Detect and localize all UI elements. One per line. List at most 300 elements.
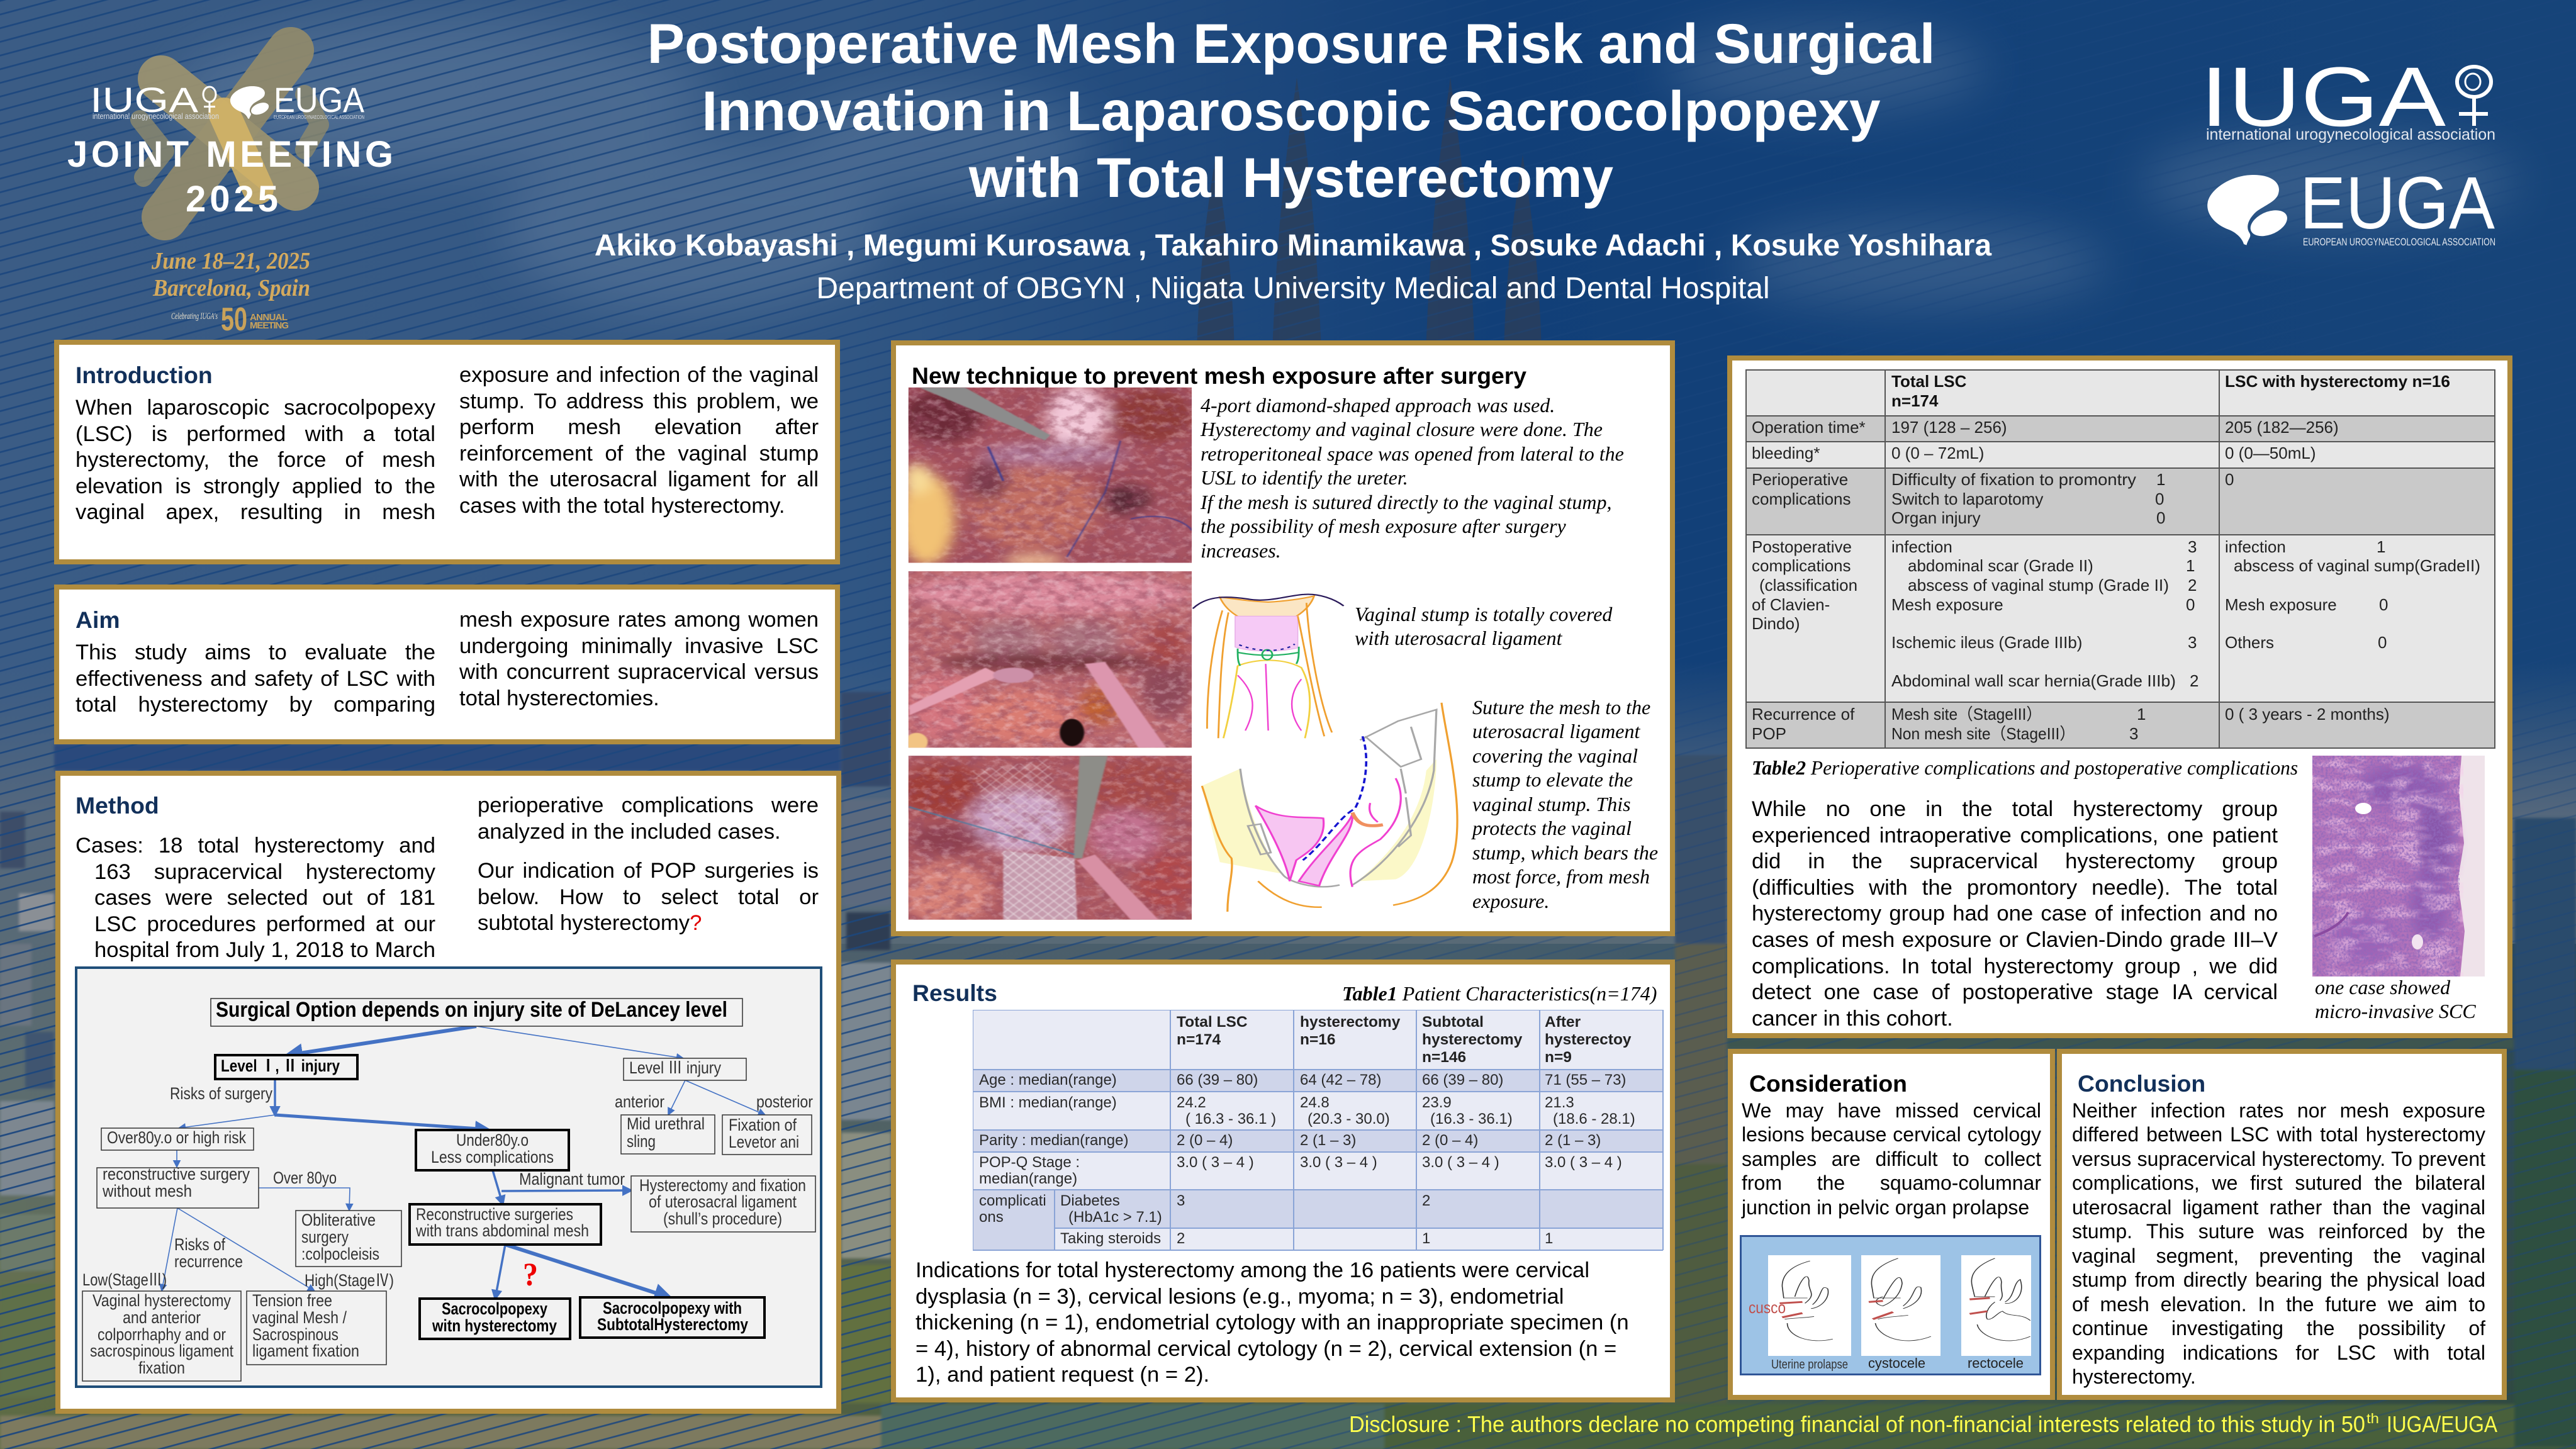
table 1 header row: hysterectomy <box>1300 1014 1401 1031</box>
small EUGA logo <box>230 80 365 120</box>
table 2 total LSC column <box>1891 418 2198 743</box>
small EUGA logo: EUROPEAN UROGYNAECOLOGICAL ASSOCIATION <box>274 115 364 120</box>
figure: prolapse diagrams <box>1740 1235 2041 1375</box>
box: sacrocolpopexy with hysterectomy <box>420 1299 570 1339</box>
table 2 row labels: Operation time* <box>1752 418 1866 437</box>
text: introduction left column: When laparoscopic sacrocolpopexy <box>76 396 435 420</box>
table 2 row labels <box>1752 418 1866 743</box>
text: method right column: perioperative complications were <box>478 793 819 817</box>
text: aim right column: undergoing minimally invasive LSC <box>459 634 819 658</box>
text: method left column: 163 supracervical hysterectomy <box>94 860 435 884</box>
box: over 80 or high risk: Over80y.o or high risk <box>107 1128 246 1147</box>
text: suture caption: vaginal stump. This <box>1472 793 1631 815</box>
label: anterior and posterior: posterior <box>756 1092 813 1111</box>
table 1 data rows: ons <box>979 1209 1004 1226</box>
caption: table 2: Table2 Perioperative complications and postoperative complications <box>1752 757 2298 779</box>
text: consideration <box>1742 1099 2041 1219</box>
text: aim right column: mesh exposure rates among women <box>459 608 819 632</box>
text: indications for total hysterectomy: thickening (n = 1), endometrial cytology with an inappropriate specimen (n <box>916 1311 1629 1334</box>
text: introduction right column: cases with the total hysterectomy. <box>459 494 785 518</box>
table 2 LSC with hysterectomy column: abscess of vaginal sump(GradeII) <box>2234 556 2480 575</box>
label: cusco: cusco <box>1749 1298 1786 1317</box>
EUGA logo <box>2207 162 2495 248</box>
table 1 header row: n=146 <box>1422 1049 1466 1066</box>
text: complications findings: cancer in this cohort. <box>1752 1007 1953 1031</box>
text: consideration: junction in pelvic organ prolapse <box>1742 1196 2029 1219</box>
box: tension free vaginal mesh: Tension free <box>252 1291 332 1310</box>
photo: vaginal stump laparoscopic view <box>899 386 1194 567</box>
box: obliterative surgery <box>296 1211 401 1267</box>
table 2 row labels: POP <box>1752 724 1786 743</box>
text: conclusion: stump. This suture was reinforced by the <box>2072 1220 2485 1243</box>
table 1 data rows: median(range) <box>979 1170 1077 1187</box>
table 2 total LSC column: Difficulty of fixation to promontry <box>1891 470 2136 489</box>
label: over 80yo: Over 80yo <box>273 1168 337 1187</box>
box: tension free vaginal mesh: vaginal Mesh / <box>252 1308 347 1327</box>
box: sacrocolpopexy with hysterectomy: Sacrocolpopexy <box>442 1299 547 1318</box>
meeting name: JOINT MEETING <box>67 134 393 175</box>
table 2 LSC with hysterectomy column: 1 <box>2377 537 2385 556</box>
table 1 data rows: 2 <box>1422 1192 1430 1209</box>
box: fixation of levetor ani: Levetor ani <box>729 1133 799 1151</box>
table 2 row labels: Recurrence of <box>1752 705 1855 724</box>
text: aim right column <box>459 607 819 712</box>
text: introduction left column <box>76 396 435 524</box>
label: low and high stage: Low(StageⅢ) <box>82 1270 167 1289</box>
text: complications findings: experienced intraoperative complications, one patient <box>1752 824 2278 848</box>
panel: results <box>891 959 1675 1402</box>
box: hysterectomy and fixation: (shull’s procedure) <box>663 1209 782 1228</box>
text: aim left column <box>76 640 435 719</box>
text: aim right column: with concurrent supracervical versus <box>459 660 819 684</box>
box: reconstructive surgeries with mesh: with trans abdominal mesh <box>415 1221 589 1240</box>
caption: table 1: Table1 Patient Characteristics(n=174) <box>1342 982 1657 1005</box>
text: complications findings: hysterectomy group had one case of infection and no <box>1752 902 2278 926</box>
text: method left column: Cases: 18 total hysterectomy and <box>76 834 435 858</box>
text: introduction right column: perform mesh elevation after <box>459 415 819 439</box>
text: suture caption: protects the vaginal <box>1472 817 1632 839</box>
image: histology micrograph <box>2312 756 2485 976</box>
text: conclusion: versus supracervical hysterectomy. To prevent <box>2072 1148 2485 1170</box>
panel: new technique <box>891 340 1675 936</box>
dates and location: June 18–21, 2025 <box>151 248 310 274</box>
text: consideration: from the squamo-columnar <box>1742 1172 2041 1194</box>
small IUGA logo <box>90 80 219 121</box>
box: tension free vaginal mesh: Sacrospinous <box>252 1325 339 1344</box>
text: suture caption: most force, from mesh <box>1472 865 1650 888</box>
text: complications findings: did in the supracervical hysterectomy group <box>1752 849 2278 873</box>
text: consideration: We may have missed cervical <box>1742 1099 2041 1122</box>
table 1 data rows: 2 (0 – 4) <box>1422 1132 1478 1149</box>
text: introduction right column <box>459 363 819 518</box>
table 1 data rows: (16.3 - 36.1) <box>1430 1111 1513 1127</box>
table 1 data rows: 1 <box>1545 1230 1553 1247</box>
table 2 row labels: complications <box>1752 556 1851 575</box>
box: sacrocolpopexy with hysterectomy: witn hysterectomy <box>432 1316 557 1335</box>
logo: IUGA EUGA Joint Meeting 2025 <box>67 27 393 338</box>
table 2 total LSC column: Non mesh site（StageIII） <box>1891 724 2075 743</box>
diagram: uterine prolapse <box>1768 1255 1851 1372</box>
label: risks of recurrence: recurrence <box>174 1252 243 1271</box>
box: obliterative surgery: :colpocleisis <box>301 1245 379 1263</box>
table 2 total LSC column: Mesh site（StageIII） <box>1891 705 2042 724</box>
heading: Results: Results <box>912 980 997 1006</box>
box: under 80 less complications: Under80y.o <box>456 1131 529 1150</box>
heading: Method: Method <box>76 792 159 819</box>
table 2 total LSC column: 0 (0 – 72mL) <box>1891 444 1984 462</box>
diagram: vaginal stump covered by ligament <box>1193 595 1343 738</box>
table 1 data rows: ( 16.3 - 36.1 ) <box>1185 1111 1276 1127</box>
box: tension free vaginal mesh: ligament fixation <box>252 1341 359 1360</box>
box: reconstructive surgeries with mesh: Reconstructive surgeries <box>416 1205 573 1224</box>
text: indications for total hysterectomy: = 4), history of abnormal cervical cytology (n = 2), cervical extension (n = <box>916 1337 1616 1361</box>
diagram: sagittal view mesh suture <box>1202 703 1457 912</box>
table 1 data rows: 3.0 ( 3 – 4 ) <box>1545 1154 1622 1171</box>
text: suture caption: uterosacral ligament <box>1472 720 1640 742</box>
text: introduction right column: exposure and infection of the vaginal <box>459 363 819 387</box>
text: method left column: cases were selected out of 181 <box>94 886 435 910</box>
text: complications findings: (difficulties with the promontory needle). The total <box>1752 876 2278 900</box>
table 1 data rows: 3 <box>1177 1192 1185 1209</box>
table 1 data rows: 23.9 <box>1422 1094 1452 1111</box>
table 1 header row: n=16 <box>1300 1031 1336 1048</box>
text: technique description: 4-port diamond-shaped approach was used. <box>1201 394 1555 417</box>
table 2 LSC with hysterectomy column: Mesh exposure <box>2225 595 2337 614</box>
small IUGA logo: IUGA <box>90 80 199 120</box>
table 2 row labels: (classification <box>1759 576 1857 595</box>
table 1 data rows: BMI : median(range) <box>979 1094 1117 1111</box>
table 2 LSC with hysterectomy column: 0 ( 3 years - 2 months) <box>2225 705 2390 724</box>
table 1 header row: hysterectoy <box>1545 1031 1632 1048</box>
text: technique description: Hysterectomy and vaginal closure were done. The <box>1201 418 1603 440</box>
table 1 data rows: (HbA1c > 7.1) <box>1068 1209 1162 1226</box>
box: fixation of levetor ani <box>722 1115 812 1155</box>
table 1 data rows: Age : median(range) <box>979 1071 1117 1088</box>
box: vaginal hysterectomy: colporrhaphy and or <box>98 1325 226 1344</box>
text: technique description: increases. <box>1201 539 1281 562</box>
label: low and high stage: High(StageⅣ) <box>305 1271 394 1290</box>
50th annual meeting mark: ANNUAL <box>250 312 288 323</box>
text: method right column: Our indication of POP surgeries is <box>478 859 819 883</box>
text: technique description: retroperitoneal space was opened from lateral to the <box>1201 442 1624 465</box>
table 2 total LSC column: Mesh exposure <box>1891 595 2003 614</box>
title <box>647 12 1935 209</box>
table 2 LSC with hysterectomy column: 0 <box>2225 470 2234 489</box>
table 1 data rows <box>979 1071 1635 1247</box>
panel: complications table and findings <box>1727 355 2512 1038</box>
box: vaginal hysterectomy: Vaginal hysterectomy <box>92 1291 231 1310</box>
50th annual meeting mark <box>221 301 289 338</box>
table 1 data rows: (18.6 - 28.1) <box>1553 1111 1635 1127</box>
table 1 data rows: complicati <box>979 1192 1046 1209</box>
diagram: cystocele: cystocele <box>1868 1355 1925 1371</box>
text: suture caption: covering the vaginal <box>1472 744 1638 767</box>
table 1 data rows: 3.0 ( 3 – 4 ) <box>1300 1154 1377 1171</box>
box: hysterectomy and fixation <box>631 1176 815 1232</box>
label: anterior and posterior: anterior <box>615 1092 664 1111</box>
label: low and high stage <box>82 1270 394 1290</box>
text: introduction left column: elevation is strongly applied to the <box>76 474 435 498</box>
text: technique description: If the mesh is sutured directly to the vaginal stump, <box>1201 491 1612 513</box>
table 1 data rows: 2 (1 – 3) <box>1545 1132 1601 1149</box>
text: indications for total hysterectomy <box>916 1258 1658 1389</box>
text: method left column: LSC procedures performed at our <box>94 912 435 936</box>
panel: method <box>55 771 841 1414</box>
table 1 data rows: 2 (1 – 3) <box>1300 1132 1356 1149</box>
figures: surgical photos and anatomical diagrams <box>909 388 1459 920</box>
table 1 header row: hysterectomy <box>1422 1031 1523 1048</box>
box: vaginal hysterectomy: and anterior <box>123 1308 201 1327</box>
table 1 data rows: 2 <box>1177 1230 1185 1247</box>
box: obliterative surgery: surgery <box>301 1228 349 1246</box>
EUGA logo: EUGA <box>2300 162 2495 245</box>
small EUGA logo: EUGA <box>274 80 365 120</box>
table 1 data rows: Diabetes <box>1060 1192 1120 1209</box>
box: Level I, II injury: Level Ⅰ, Ⅱ injury <box>221 1056 340 1075</box>
table 2 LSC with hysterectomy column: 205 (182—256) <box>2225 418 2339 437</box>
table 2 row labels: Perioperative <box>1752 470 1848 489</box>
panel: aim <box>54 585 840 744</box>
text: indications for total hysterectomy: 1), and patient request (n = 2). <box>916 1363 1209 1387</box>
table 2 total LSC column: 1 <box>2186 556 2195 575</box>
box: vaginal hysterectomy <box>82 1291 241 1381</box>
title: Innovation in Laparoscopic Sacrocolpopexy <box>702 79 1881 142</box>
table 2 LSC with hysterectomy column: infection <box>2225 537 2286 556</box>
text: complications findings: complications. In total hysterectomy group , we did <box>1752 954 2278 978</box>
text: introduction right column: stump. To address this problem, we <box>459 389 819 413</box>
text: conclusion: vaginal segment, preventing the vaginal <box>2072 1245 2485 1267</box>
IUGA logo <box>2200 50 2495 144</box>
text: method right column: analyzed in the included cases. <box>478 820 781 844</box>
box: fixation of levetor ani: Fixation of <box>729 1116 797 1134</box>
table 2 total LSC column: 1 <box>2156 470 2165 489</box>
text: complications findings <box>1752 797 2278 1032</box>
text: conclusion: differed between LSC with total hysterectomy <box>2072 1123 2485 1146</box>
diagram: cystocele <box>1861 1255 1940 1371</box>
disclosure <box>1347 1407 2504 1442</box>
heading: Conclusion: Conclusion <box>2078 1070 2205 1097</box>
caption: histology: micro-invasive SCC <box>2315 1000 2476 1022</box>
label: anterior and posterior <box>615 1092 813 1111</box>
table 2 LSC with hysterectomy column: Others <box>2225 633 2274 652</box>
table 2 LSC with hysterectomy column: 0 <box>2379 595 2388 614</box>
table 1 header row: n=9 <box>1545 1049 1572 1066</box>
table 1 header row <box>1177 1014 1632 1066</box>
text: technique description: the possibility of mesh exposure after surgery <box>1201 515 1566 537</box>
box: vaginal hysterectomy: sacrospinous ligament <box>90 1341 233 1360</box>
text: method left column: hospital from July 1, 2018 to March <box>94 938 435 962</box>
box: mid urethral sling <box>621 1114 715 1154</box>
table 2 total LSC column: 197 (128 – 256) <box>1891 418 2007 437</box>
table 1 data rows: 3.0 ( 3 – 4 ) <box>1177 1154 1254 1171</box>
text: indications for total hysterectomy: Indications for total hysterectomy among the 16 patients were cervical <box>916 1258 1589 1282</box>
logos: IUGA and EUGA <box>2200 57 2495 248</box>
table 2 row labels: complications <box>1752 490 1851 508</box>
table 1 header row: After <box>1545 1014 1581 1031</box>
text: aim right column: total hysterectomies. <box>459 686 659 710</box>
table 2 total LSC column: 3 <box>2188 537 2197 556</box>
table 2 row labels: of Clavien- <box>1752 595 1830 614</box>
table 1 data rows: Taking steroids <box>1060 1230 1161 1247</box>
authors: Akiko Kobayashi , Megumi Kurosawa , Takahiro Minamikawa , Sosuke Adachi , Kosuke Yoshihara <box>595 229 1991 262</box>
text: consideration: samples are difficult to collect <box>1742 1148 2041 1170</box>
text: suture caption: exposure. <box>1472 890 1549 912</box>
table: perioperative and postoperative complications <box>1745 369 2496 749</box>
table 1 data rows: 64 (42 – 78) <box>1300 1071 1381 1088</box>
text: stump covered caption: with uterosacral ligament <box>1355 627 1562 649</box>
affiliation: Department of OBGYN , Niigata University Medical and Dental Hospital <box>816 272 1770 305</box>
box: sacrocolpopexy with subtotal hysterectomy: Sacrocolpopexy with <box>603 1299 742 1318</box>
text: suture caption: stump to elevate the <box>1472 768 1633 791</box>
text: aim left column: total hysterectomy by comparing <box>76 693 435 717</box>
text: conclusion: continue investigating the possibility of <box>2072 1317 2485 1340</box>
table 2 total LSC column: Switch to laparotomy <box>1891 490 2043 508</box>
table 2 total LSC column: infection <box>1891 537 1952 556</box>
table 1 data rows: 1 <box>1422 1230 1430 1247</box>
table 2 LSC with hysterectomy column <box>2225 418 2480 724</box>
IUGA logo: international urogynecological association <box>2206 126 2495 143</box>
disclosure: th <box>2366 1411 2379 1426</box>
text: conclusion: Neither infection rates nor mesh exposure <box>2072 1099 2485 1122</box>
text: introduction left column: (LSC) is performed with a total <box>76 422 435 446</box>
icon: tan X emblem <box>140 50 320 217</box>
table 2 total LSC column: Organ injury <box>1891 508 1981 527</box>
text: introduction left column: vaginal apex, resulting in mesh <box>76 500 435 524</box>
box: reconstructive surgery without mesh <box>97 1165 259 1208</box>
caption: histology <box>2315 975 2476 1024</box>
table: patient characteristics <box>973 1010 1664 1251</box>
table 1 data rows: (20.3 - 30.0) <box>1308 1111 1390 1127</box>
table 1 data rows: 71 (55 – 73) <box>1545 1071 1626 1088</box>
box: sacrocolpopexy with subtotal hysterectomy: SubtotalHysterectomy <box>597 1315 748 1334</box>
label: malignant tumor: Malignant tumor <box>519 1170 625 1189</box>
dates and location: Barcelona, Spain <box>152 275 310 301</box>
text: aim left column: effectiveness and safety of LSC with <box>76 667 435 691</box>
50th annual meeting mark: 50 <box>221 301 247 338</box>
heading: new technique: New technique to prevent mesh exposure after surgery <box>912 362 1526 389</box>
table 1 data rows: 21.3 <box>1545 1094 1574 1111</box>
text: suture caption <box>1472 695 1658 913</box>
small IUGA logo: international urogynecological association <box>92 111 219 121</box>
heading: Consideration: Consideration <box>1749 1070 1907 1097</box>
box: reconstructive surgeries with mesh <box>410 1204 601 1245</box>
text: introduction left column: hysterectomy, the force of mesh <box>76 448 435 472</box>
label: risks of surgery: Risks of surgery <box>170 1084 272 1103</box>
table 2 total LSC column: Ischemic ileus (Grade IIIb) <box>1891 633 2082 652</box>
text: technique description <box>1201 393 1624 562</box>
table 2 total LSC column: abdominal scar (Grade II) <box>1908 556 2093 575</box>
box: mid urethral sling: Mid urethral <box>627 1114 705 1133</box>
table 1 data rows: 66 (39 – 80) <box>1422 1071 1503 1088</box>
text: conclusion: hysterectomy. <box>2072 1365 2196 1388</box>
text: conclusion: stump from directly bearing the physical load <box>2072 1268 2485 1291</box>
photo: uterosacral ligament suture <box>905 571 1192 751</box>
text: complications findings: detect one case of postoperative stage IA cervical <box>1752 980 2278 1004</box>
text: conclusion: uterosacral ligament rather than the vaginal <box>2072 1196 2485 1219</box>
disclosure: Disclosure : The authors declare no competing financial of non-financial interests related to this study in 50 <box>1349 1411 2365 1437</box>
diagram: rectocele: rectocele <box>1968 1355 2024 1371</box>
text: conclusion: of mesh elevation. In the future we aim to <box>2072 1293 2485 1316</box>
table 2 row labels: Postoperative <box>1752 537 1852 556</box>
table 2 total LSC column: 3 <box>2188 633 2197 652</box>
text: consideration: lesions because cervical cytology <box>1742 1123 2041 1146</box>
table 2 total LSC column: 2 <box>2190 671 2198 690</box>
heading: Introduction: Introduction <box>76 362 213 388</box>
text: conclusion <box>2072 1099 2485 1389</box>
table 1 data rows: POP-Q Stage : <box>979 1154 1080 1171</box>
table 1 data rows: 24.8 <box>1300 1094 1330 1111</box>
diagram: uterine prolapse: Uterine prolapse <box>1771 1358 1848 1372</box>
text: method right column: subtotal hysterectomy? <box>478 911 702 935</box>
box: mid urethral sling: sling <box>627 1132 656 1151</box>
box: tension free vaginal mesh <box>247 1291 386 1365</box>
table 2 total LSC column: 0 <box>2155 490 2164 508</box>
photo: mesh fixation <box>901 756 1197 923</box>
diagram: rectocele <box>1961 1255 2031 1371</box>
text: complications findings: cases of mesh exposure or Clavien-Dindo grade III–V <box>1752 928 2278 952</box>
table 2 total LSC column: 0 <box>2156 508 2165 527</box>
table 1 header row: Subtotal <box>1422 1014 1484 1031</box>
box: under 80 less complications: Less complications <box>431 1148 554 1166</box>
table 2 row labels: Dindo) <box>1752 614 1800 633</box>
table 2 LSC with hysterectomy column: 0 (0—50mL) <box>2225 444 2316 462</box>
text: stump covered caption <box>1355 602 1612 651</box>
text: introduction right column: reinforcement of the vaginal stump <box>459 442 819 466</box>
table 2 total LSC column: abscess of vaginal stump (Grade II) <box>1908 576 2169 595</box>
table 2 total LSC column: Abdominal wall scar hernia(Grade IIIb) <box>1891 671 2176 690</box>
dates and location: Celebrating IUGA's <box>171 311 218 322</box>
box: reconstructive surgery without mesh: without mesh <box>102 1182 192 1200</box>
table 2 row labels: bleeding* <box>1752 444 1820 462</box>
heading: Aim: Aim <box>76 607 120 633</box>
flowchart: surgical option by DeLancey level <box>75 966 822 1388</box>
flowchart arrows <box>162 1026 765 1299</box>
table 1 data rows: 24.2 <box>1177 1094 1206 1111</box>
box: reconstructive surgery without mesh: reconstructive surgery <box>103 1165 250 1183</box>
table 1 header row: Total LSC <box>1177 1014 1248 1031</box>
text: suture caption: Suture the mesh to the <box>1472 696 1650 719</box>
table 2 total LSC column: 3 <box>2129 724 2138 743</box>
panel: conclusion <box>2057 1049 2507 1400</box>
50th annual meeting mark: MEETING <box>250 320 289 331</box>
table 2 header row: Total LSC <box>1891 372 1967 391</box>
table 2 LSC with hysterectomy column: 0 <box>2378 633 2387 652</box>
table 1 data rows: 66 (39 – 80) <box>1177 1071 1258 1088</box>
text: conclusion: expanding indications for LSC with total <box>2072 1341 2485 1364</box>
text: complications findings: While no one in the total hysterectomy group <box>1752 797 2278 821</box>
box: obliterative surgery: Obliterative <box>301 1211 376 1229</box>
table 2 header row: LSC with hysterectomy n=16 <box>2225 372 2450 391</box>
table 1 data rows: 2 (0 – 4) <box>1177 1132 1233 1149</box>
table 2 header row: n=174 <box>1891 391 1939 410</box>
table 2 total LSC column: 1 <box>2137 705 2146 724</box>
dates and location <box>151 248 310 322</box>
text: indications for total hysterectomy: dysplasia (n = 3), cervical lesions (e.g., myoma; n = 3), endometrial <box>916 1285 1564 1309</box>
text: technique description: USL to identify the ureter. <box>1201 466 1408 489</box>
table 2 total LSC column: 2 <box>2188 576 2197 595</box>
text: suture caption: stump, which bears the <box>1472 841 1658 864</box>
text: aim left column: This study aims to evaluate the <box>76 641 435 664</box>
label: risks of recurrence: Risks of <box>174 1235 225 1254</box>
meeting name <box>67 134 393 220</box>
caption: histology: one case showed <box>2315 976 2450 999</box>
box: flowchart title: Surgical Option depends on injury site of DeLancey level <box>216 998 727 1022</box>
box: sacrocolpopexy with subtotal hysterectomy <box>580 1297 764 1338</box>
icon: red question mark: ? <box>523 1257 538 1293</box>
text: method right column <box>478 793 819 937</box>
text: conclusion: complications, we first sutured the bilateral <box>2072 1172 2485 1194</box>
title: with Total Hysterectomy <box>969 146 1613 209</box>
